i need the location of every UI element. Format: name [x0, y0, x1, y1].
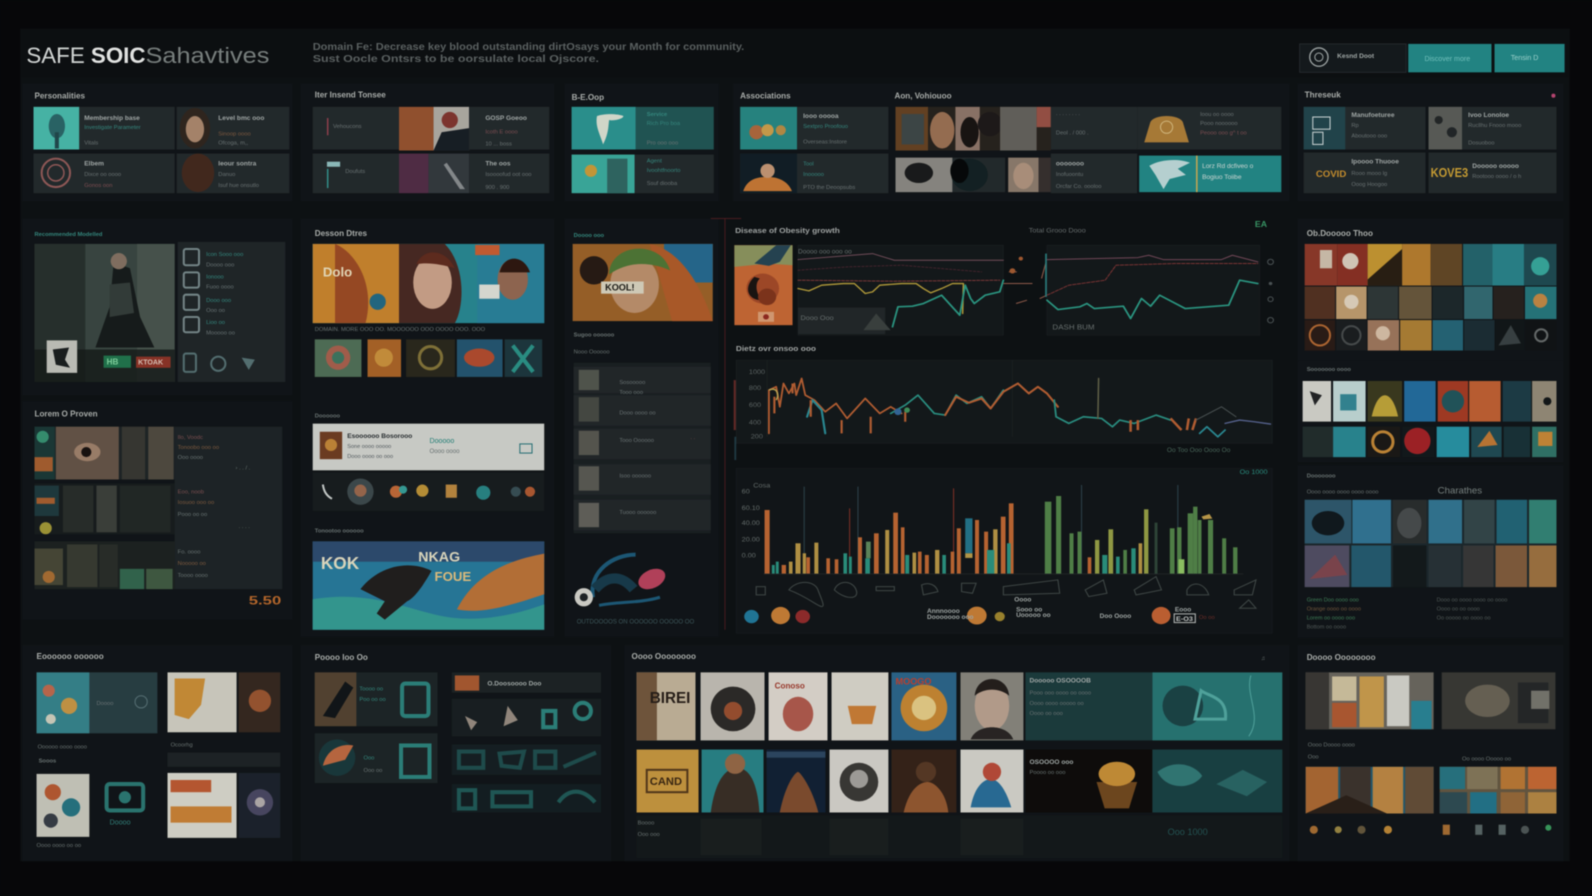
legend: status circles: Annnoooo — [927, 608, 960, 615]
card: ring: Dixce oo oooo — [84, 172, 121, 178]
heading: Dooooooo — [1307, 473, 1336, 479]
chart: bar series: 40.00 — [742, 520, 760, 527]
card: umber: Isuf hue onsutlo — [218, 183, 259, 189]
legend: status circles — [744, 597, 1215, 625]
icon: teal frame — [107, 784, 143, 827]
card: orange figure: Inooooo — [803, 172, 824, 178]
panel: feature and list — [22, 219, 292, 395]
grid: icon list — [452, 672, 601, 812]
mosaic — [1305, 500, 1556, 587]
mosaic — [1305, 244, 1556, 351]
card: portrait: Sinoop oooo — [218, 131, 251, 137]
card: metric b: 10 ... boss — [485, 141, 512, 147]
panel: colour mosaic top — [1298, 219, 1564, 361]
button: secondary: Tensin D — [1511, 54, 1538, 62]
title: SAFE SOICSahavtives — [26, 43, 269, 68]
image: monochrome abstract — [896, 158, 1005, 192]
card: lower left: Ooo oo — [363, 768, 382, 774]
text: caption — [1308, 742, 1511, 763]
image: book cover — [637, 672, 695, 740]
card: kove: Dooooo ooooo — [1472, 163, 1519, 170]
image strip: thumbnails — [315, 339, 542, 377]
card: metric d: 900 . 900 — [485, 185, 509, 191]
list: notes: Ooo oooo — [178, 455, 203, 461]
heading: Eoooooo oooooo — [37, 652, 104, 661]
panel: row one right — [1298, 84, 1564, 201]
legend: status circles: Doo Oooo — [1100, 613, 1131, 620]
panel: profile column — [565, 219, 719, 637]
image: night figure — [767, 750, 825, 812]
button: primary: Discover more — [1424, 55, 1470, 63]
heading: Recommended Modelled — [35, 232, 103, 238]
image: comic hero — [960, 750, 1023, 812]
image: sun: MOOGO — [896, 677, 932, 687]
heading: Estimation by oca — [739, 467, 811, 476]
list: notes: Toooo oooo — [178, 573, 208, 579]
card: foliage — [1429, 107, 1556, 150]
text: notes: Dooo oo oooo oooo oo oooo — [1437, 597, 1507, 603]
text: caption: Ooo — [1308, 755, 1319, 761]
card: gold bag: Pooo noooooo — [1200, 121, 1238, 127]
text: footer: Boooo — [638, 821, 654, 827]
list: notes: › . . / . — [236, 465, 251, 471]
list: icon rows: Lioo oo — [206, 320, 225, 326]
label bar — [168, 753, 280, 767]
card: teal: Vitals — [84, 140, 98, 146]
card: note — [1051, 107, 1137, 150]
card: teal room — [572, 155, 714, 193]
status dot — [1551, 94, 1555, 98]
image: cup — [832, 672, 888, 740]
card: bright teal: Lorz Rd dcfiveo o — [1202, 163, 1254, 170]
text: notes: Bottom oo oooo — [1307, 625, 1346, 631]
list: notes: Eoo, noob — [178, 490, 204, 496]
card: ring — [34, 154, 175, 193]
chart: bar series: Oo 1000 — [1240, 469, 1268, 476]
image: gold cover: CAND — [650, 776, 682, 788]
image: red cover — [769, 672, 827, 740]
image: comic portrait — [573, 244, 713, 321]
card: teal group: Iooo ooooa — [803, 113, 839, 120]
card: text — [1051, 154, 1137, 193]
card: teal shape: Rich Pro boa — [647, 121, 681, 127]
card: covid: Rooo mooo lg — [1351, 171, 1387, 177]
card: white message: Esoooooo Bosorooo — [347, 433, 412, 440]
card: white message: Dooooo — [429, 437, 454, 445]
label: Ocoorhg — [171, 743, 193, 749]
connector: chart nodes — [1003, 254, 1047, 304]
card: bright teal: Bogiuo Toiibe — [1202, 174, 1242, 181]
heading: Nooo Oooooo — [574, 350, 610, 356]
heading: Doooo Oooooooo — [1307, 653, 1376, 662]
list: profile rows: Dooo oooo oo — [619, 410, 656, 416]
card: kove: Rootooo oooo / o h — [1472, 174, 1521, 180]
image: portrait — [960, 672, 1023, 740]
image: seated figure: KTOAK — [138, 359, 164, 367]
card: schedule: Aboutooo ooo — [1351, 133, 1387, 139]
card: teal emblem — [1152, 672, 1282, 740]
image: adventure hero: FOUE — [435, 569, 471, 584]
card: metric c — [313, 154, 399, 193]
legend: status circles: Sooo oo — [1016, 607, 1042, 613]
label: Total Grooo Dooo — [1029, 227, 1086, 234]
heading: Disease of Obesity growth — [735, 226, 840, 235]
list: notes — [175, 427, 282, 589]
list: profile rows: Tooo ooo — [619, 390, 643, 396]
logo: ring — [575, 555, 669, 606]
chart: bar series: Cosa — [753, 483, 770, 489]
chart: multicolour line: 400 — [749, 420, 761, 427]
text: footer: Ooo 1000 — [1168, 827, 1208, 837]
panel: colour mosaic bottom — [1298, 465, 1564, 638]
text: notes: Oo ooooo oo oooo oo — [1437, 616, 1491, 622]
image: floral — [37, 774, 89, 837]
chart: multicolour line: 600 — [749, 402, 761, 409]
chart: comparison lines: DASH BUM — [1052, 323, 1095, 331]
image: gold cover — [637, 750, 699, 812]
panel: bottom right — [1298, 645, 1564, 861]
chart: bar series — [736, 468, 1272, 633]
text: notes: Oooo oo oo oooo — [1437, 606, 1480, 612]
text: notes: Lorem oo oooo ooo — [1307, 616, 1355, 622]
panel: colour mosaic middle — [1298, 361, 1564, 462]
card: schedule: Rp — [1351, 123, 1359, 129]
card: schedule: Manufoeturee — [1351, 112, 1395, 119]
caption: Oooo oooo oo oo — [37, 843, 81, 849]
legend: status circles: E-O3 — [1176, 616, 1193, 623]
list: icon rows: Doooo ooo — [206, 262, 234, 268]
list: icon rows: Dooo ooo — [206, 298, 231, 304]
image: comic portrait: KOOL! — [605, 283, 635, 293]
card: patterned — [37, 672, 157, 733]
image: orange emblem — [734, 245, 793, 325]
card: metric b: GOSP Goeoo — [485, 115, 527, 122]
card: white message: Oooo oooo — [429, 448, 460, 455]
list: profile rows: . . — [690, 435, 696, 441]
card: top left: Poo oo oo — [359, 697, 386, 703]
card: covid: COVID — [1316, 169, 1346, 180]
heading: Iter Insend Tonsee — [315, 91, 386, 100]
heading: Personalities — [35, 92, 85, 101]
card: dark flame — [1025, 750, 1152, 812]
legend: status circles: Dooooooo ooo — [927, 614, 974, 621]
card: teal room: Ssuf diooba — [647, 181, 678, 187]
label: Oooooo oooo oooo — [38, 745, 87, 751]
label: Charathes — [1438, 486, 1482, 497]
panel: gallery — [624, 645, 1289, 861]
card: ring: Elbem — [84, 161, 104, 168]
list: icon rows — [178, 242, 285, 382]
list: notes: Pooo oo oo — [178, 512, 207, 518]
card: patterned: Doooo — [96, 701, 113, 707]
card: dark flame: OSOOOO ooo — [1030, 759, 1073, 766]
image: gold poster — [168, 672, 280, 732]
card: dark teal text: Dooooo OSOOOOB — [1030, 678, 1091, 685]
card: teal group — [740, 107, 888, 150]
badge: EA — [1255, 219, 1267, 229]
chart: multicolour line: 800 — [749, 385, 761, 392]
image: adventure hero — [313, 541, 544, 630]
image: red cover: Conoso — [775, 682, 805, 691]
legend: status circles: Oooo — [1014, 597, 1032, 603]
heading: Tonootoo oooooo — [315, 528, 364, 534]
chart: multicolour line: 1000 — [749, 369, 765, 376]
chart: wellness lines: Dooo Ooo — [801, 315, 834, 322]
action: profile: Kesnd Doot — [1337, 53, 1375, 60]
panel: row one left — [22, 84, 292, 201]
chart: bar series: 60.10 — [742, 505, 760, 512]
chart: wellness lines: Doooo ooo ooo oo — [798, 249, 852, 255]
panel: row one second — [301, 84, 554, 201]
button: primary — [1408, 44, 1491, 72]
card: orange figure — [740, 154, 888, 193]
image: disc — [701, 672, 765, 740]
card: lower left: Ooo — [363, 756, 374, 762]
mosaic — [1303, 381, 1556, 457]
card: teal shape: Pro ooo ooo — [647, 140, 678, 146]
subtitle: Domain Fe: Decrease key blood outstanding dirtOsays your Month for community. — [313, 42, 744, 53]
heading: Associations — [740, 92, 791, 101]
card: metric c: Doufuts — [345, 169, 365, 175]
card: metric a — [313, 107, 399, 150]
card: teal — [34, 107, 175, 150]
image: seated figure — [35, 244, 175, 382]
list: icon rows: Icon Sooo ooo — [206, 252, 243, 258]
list: notes: Iosuoo ooo oo — [178, 500, 214, 506]
heading: Sooooooo oooo — [1307, 367, 1351, 373]
action: profile — [1300, 44, 1406, 72]
card: gold bag: Peooo ooo g^ t oo — [1200, 130, 1247, 136]
card: kove: KOVE3 — [1431, 165, 1468, 180]
legend: status circles: Oo oo — [1199, 615, 1215, 621]
card: text: Orcfar Co. oooloo — [1056, 184, 1101, 190]
heading: Doooooo — [315, 414, 341, 420]
list: profile rows — [574, 363, 711, 533]
list: profile rows: Tooo Oooooo — [619, 438, 654, 444]
card: metric a: Vehoucons — [333, 124, 362, 130]
card: kove — [1429, 153, 1556, 193]
card: metric d: Isoooofud oot ooo — [485, 172, 531, 178]
caption: DOMAIN. MORE OOO OO. MOOOOOO OOO OOOO OOO. OOO — [315, 327, 486, 333]
icons row — [1310, 825, 1551, 835]
text: caption: Oooo Doooo oooo — [1308, 743, 1355, 749]
card: portrait: Level bmc ooo — [218, 115, 264, 122]
card: metric b: Icoth E oooo — [485, 129, 518, 135]
card: teal group: Sextpro Proofouo — [803, 124, 848, 130]
image grid — [35, 427, 175, 589]
button: secondary — [1495, 44, 1565, 72]
card: portrait — [177, 107, 289, 150]
heading: Desson Dtres — [315, 229, 368, 238]
heading: Aon, Vohiouoo — [894, 92, 952, 101]
card: dark teal text: Oooo oooo ooooo oo — [1030, 701, 1084, 707]
heading: Poooo Ioo Oo — [315, 653, 368, 662]
card: teal shape — [572, 107, 714, 150]
image: orange and white — [399, 107, 469, 151]
subtitle: Sust Oocle Ontsrs to be oorsulate local Ojscore. — [313, 54, 599, 65]
text: notes — [1307, 597, 1507, 631]
value: price: 5.50 — [249, 593, 282, 607]
card: metric d — [469, 154, 549, 193]
card: umber: Ieour sontra — [218, 161, 257, 168]
image: teal figure — [702, 750, 764, 812]
list: notes: Tonoobo ooo oo — [178, 445, 219, 451]
card: lower left — [315, 733, 438, 783]
text: caption: Oo oooo Ooooo oo — [1462, 757, 1511, 763]
card: teal group: Overseas:Instore — [803, 139, 847, 145]
heading: Doooo ooo — [574, 233, 605, 239]
list: icon rows: Ooo oo — [206, 308, 225, 314]
list: notes: Nooooo oo — [178, 561, 206, 567]
card: bright teal — [1139, 156, 1281, 192]
chart: bar series: 0.00 — [742, 553, 756, 559]
heading: Lorem O Proven — [35, 410, 98, 419]
card: covid: Ipoooo Thuooe — [1351, 159, 1399, 166]
panel: bottom second — [301, 645, 611, 861]
heading: Dietz ovr onsoo ooo — [736, 344, 816, 353]
list: icon rows: Ionooo — [206, 274, 224, 280]
card: dark teal text: Pooo ooo oooo oo oooo — [1030, 691, 1091, 697]
legend: status circles: Uooooo oo — [1016, 612, 1051, 619]
panel: bottom left — [22, 645, 292, 861]
list: notes: . . . . — [239, 524, 250, 530]
image: collage left — [1306, 672, 1434, 729]
card: text: Inofuoontu — [1056, 172, 1083, 178]
panel: analytics charts — [734, 219, 1273, 633]
card: ring: Gonos oon — [84, 183, 112, 189]
card: orange figure: Tool — [803, 162, 814, 168]
list: icon rows: Fuoo oooo — [206, 285, 234, 291]
label: Sooos — [39, 759, 56, 765]
chart: wellness lines — [798, 245, 1003, 335]
heading: Oooo Oooooooo — [632, 652, 696, 661]
card: note: . . . . . . . . — [1056, 111, 1080, 117]
card: dark teal text: Oooo oo ooo — [1030, 711, 1063, 717]
chart: bar series: 60 — [742, 489, 750, 495]
card: gold bag — [1137, 107, 1281, 150]
card: white message: Dooo oooo oo ooo — [347, 454, 393, 460]
card: top left: Toooo oo — [359, 687, 383, 693]
card: foliage: Dosuoboo — [1468, 140, 1494, 146]
divider: accent line — [711, 219, 741, 630]
image: portraits strip — [896, 107, 1051, 151]
card: umber: Danuo — [218, 172, 235, 178]
list: profile rows: Isoo oooooo — [619, 473, 651, 479]
list: notes: Fo. oooo — [178, 550, 200, 556]
text: notes: Orange oooo oo oooo — [1307, 606, 1361, 612]
image: illustrated hero: Dolo — [323, 264, 352, 279]
text: footer: Ooo ooo — [638, 832, 660, 838]
chart: comparison lines — [1047, 245, 1273, 335]
image: illustrated hero — [313, 244, 544, 323]
text: notes: Green Doo oooo ooo — [1307, 597, 1359, 603]
chart: bar series: 20.00 — [742, 537, 760, 544]
legend: status circles: Eooo — [1175, 607, 1191, 613]
icon: note: ♫ — [1261, 656, 1265, 662]
card: covid — [1304, 153, 1425, 193]
icon row — [313, 472, 544, 511]
image: seated figure: HB — [107, 358, 118, 367]
image: adventure hero: NKAG — [418, 550, 460, 566]
panel: row one fourth — [733, 84, 1289, 201]
heading: Sugoo oooooo — [574, 332, 615, 338]
chart: multicolour line: Oo Too Ooo Oooo Oo — [1167, 447, 1231, 454]
card: white message: Sone oooo ooooo — [347, 444, 391, 450]
caption: Oooo oooo oooo oooo oooo — [1307, 490, 1379, 496]
card: teal: Investigate Parameter — [84, 125, 141, 131]
card: schedule — [1304, 107, 1425, 150]
text: footer — [637, 816, 1282, 858]
icon: teal frame: Doooo — [110, 819, 131, 827]
list: profile rows: Sosooooo — [619, 380, 645, 386]
card: covid: Ooog Hoogoo — [1351, 182, 1387, 188]
card: foliage: Rucllhu Fnooo mooo — [1468, 123, 1521, 129]
heading: B-E.Oop — [572, 93, 604, 102]
grid: icon list: O.Doosoooo Doo — [487, 681, 541, 688]
card: orange figure: PTO the Deoopsubs — [803, 185, 855, 191]
map outlines — [756, 577, 1256, 608]
image: mosaic — [1440, 767, 1556, 814]
caption: OUTDOOOOS ON OOOOOO OOOOO OO — [577, 619, 694, 626]
card: gold bag: Ioou oo oooo — [1200, 112, 1234, 118]
image: adventure hero: KOK — [321, 553, 360, 573]
panel: row one third — [565, 84, 719, 201]
list: notes: Ilo, Voodc — [178, 435, 203, 441]
list: icon rows: Mooooo oo — [206, 330, 235, 336]
image: sun — [891, 672, 956, 740]
card: metric b — [469, 107, 549, 150]
panel: lorem grid — [22, 401, 292, 620]
image: collage right — [1442, 672, 1555, 729]
card: note: Deol . / 000 . — [1056, 130, 1089, 136]
heading: Threseuk — [1305, 91, 1341, 100]
chart: multicolour line — [734, 360, 1272, 460]
card: teal map — [1152, 750, 1282, 812]
card: white message — [313, 424, 544, 470]
image: white disc — [830, 750, 888, 812]
card: teal: Membership base — [84, 115, 140, 122]
card: teal room: Agent — [647, 159, 662, 165]
heading: Ob.Dooooo Thoo — [1307, 229, 1373, 238]
card: foliage: Ivoo Lonoloe — [1468, 112, 1509, 119]
card: top left — [315, 672, 438, 726]
image: book cover: BIREI — [650, 690, 690, 707]
image: sunset strip — [1306, 767, 1434, 814]
image: small portrait — [1008, 158, 1051, 192]
card: dark teal text — [1025, 672, 1152, 740]
image: purple and grey — [399, 154, 469, 193]
image: brown portrait — [891, 750, 956, 812]
card: umber — [177, 154, 289, 193]
card: portrait: Ofcoga, m,, — [218, 140, 248, 146]
image: poster and portrait — [168, 773, 280, 838]
list: profile rows: Tuooo oooooo — [619, 510, 656, 516]
card: teal room: Ivoohtfnoorto — [647, 168, 680, 174]
card: text: ooooooo — [1056, 161, 1084, 168]
header — [20, 29, 1570, 77]
card: dark flame: Poooo oo ooo — [1030, 770, 1065, 776]
chart: multicolour line: 200 — [751, 434, 763, 440]
card: metric d: The oos — [485, 161, 511, 168]
card: teal shape: Service — [647, 112, 668, 118]
panel: media column — [301, 219, 554, 637]
